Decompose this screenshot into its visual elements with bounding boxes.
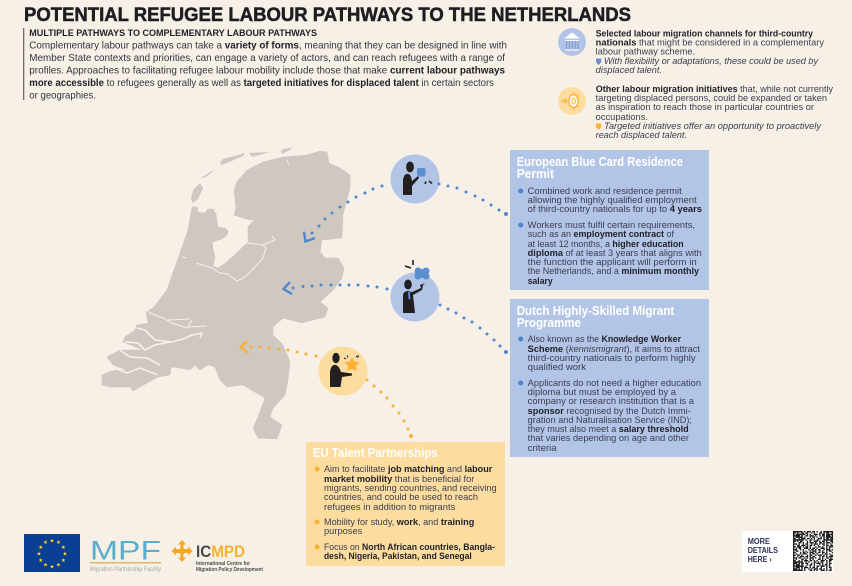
legend: other labour migration initiatives [558,84,833,140]
text: more details here: HERE › [748,555,772,564]
logo: EU flag: ★ [37,551,42,557]
panel: European Blue Card Residence Permit: such as an employment contract of [528,229,674,239]
panel: EU Talent Partnerships: purposes [324,526,363,536]
text: more details here: DETAILS [748,546,778,555]
panel: Dutch Highly-Skilled Migrant Programme: Applicants do not need a higher education [528,378,701,388]
legend: other labour migration initiatives: reach displaced talent. [596,130,687,140]
arrow: highly-skilled route to the map [284,282,508,354]
QR finder patterns [793,531,833,571]
legend: other labour migration initiatives: Other labour migration initiatives that, while not currently [596,84,833,94]
icon: person with puzzle piece, blue circle [390,260,440,322]
logo: Migration Partnership Facility: MPF [90,536,161,566]
legend: other labour migration initiatives: as inspiration to reach those in particular countries or [596,102,814,112]
text block: multiple pathways introduction [23,27,507,102]
panel: EU Talent Partnerships: market mobility that is beneficial for [324,474,474,484]
panel: EU Talent Partnerships: countries, and could be used to reach [324,492,478,502]
text block: multiple pathways introduction: profiles. Approaches to facilitating refugee labour mobility include those that make current labour pathways [29,66,505,76]
heading: Dutch Highly-Skilled [517,304,675,330]
icon: target with arrow [558,87,586,115]
heading: Dutch Highly-Skilled: Dutch Highly-Skilled Migrant [517,304,675,318]
legend: other labour migration initiatives: Targeted initiatives offer an opportunity to proactively [604,121,821,131]
panel: European Blue Card Residence Permit: the Netherlands, and a minimum monthly [528,266,700,276]
text: more details here: MORE [748,537,770,546]
panel: EU Talent Partnerships [306,442,505,566]
panel: Dutch Highly-Skilled Migrant Programme: company or research institution that is a [528,396,695,406]
title: POTENTIAL REFUGEE LABOUR PATHWAYS TO THE NETHERLANDS [24,4,631,26]
text block: multiple pathways introduction: more accessible to refugees generally as well as targeted initiatives for displaced talent in certain sectors [29,78,494,89]
panel: Dutch Highly-Skilled Migrant Programme: criteria [528,443,558,453]
panel: European Blue Card Residence Permit: allowing the highly qualified employment [528,195,697,205]
legend: selected labour migration channels: displaced talent. [596,65,662,75]
panel: EU Talent Partnerships: Mobility for study, work, and training [324,517,474,527]
legend: other labour migration initiatives: targeting displaced persons, could be expanded or taken [596,93,827,103]
icon: person with star, yellow circle [318,346,368,396]
logo: EU flag: ★ [43,563,48,569]
link box: more details with QR code [742,531,833,572]
logo: EU flag: ★ [38,545,43,551]
legend: selected labour migration channels: Selected labour migration channels for third-country [596,28,814,38]
text: more details here [748,537,778,564]
text block: multiple pathways introduction: or geographies. [29,90,96,102]
logo: EU flag: ★ [38,558,43,564]
panel: European Blue Card Residence Permit: Workers must fulfil certain requirements, [528,220,695,230]
icon: blue pin [596,58,601,65]
icon: institution building [558,28,586,56]
panel: EU Talent Partnerships: refugees in addition to migrants [324,502,456,512]
arrow: blue card route to the map [304,182,508,242]
logo: EU flag: ★ [50,564,55,570]
panel: Dutch Highly-Skilled Migrant Programme: qualified work [528,362,586,372]
map of the Netherlands [102,147,350,439]
legend: other labour migration initiatives: occupations. [596,112,648,122]
heading: EU Talent Partnerships: EU Talent Partnerships [313,446,438,460]
logo: Migration Partnership Facility [90,536,162,573]
legend: selected labour migration channels: With flexibility or adaptations, these could be used by [604,56,818,66]
legend: selected labour migration channels: nationals that might be considered in a complementary [596,38,824,48]
logo: EU flag: ★ [61,545,66,551]
icon: yellow pin [596,124,601,130]
panel: European Blue Card Residence Permit: diploma of at least 3 years that aligns with [528,248,702,258]
panel: EU Talent Partnerships: migrants, sending countries, and receiving [324,483,497,493]
logo: EU flag: ★ [63,551,68,557]
panel: Dutch Highly-Skilled Migrant Programme: third-country nationals to perform highly [528,353,696,363]
panel: European Blue Card Residence Permit: salary [528,276,554,286]
icon: four arrows [172,540,192,562]
panel: Dutch Highly-Skilled Migrant Programme: they must also meet a salary threshold [528,424,689,434]
heading: multiple pathways: MULTIPLE PATHWAYS TO COMPLEMENTARY LABOUR PATHWAYS [29,27,317,38]
panel: EU Talent Partnerships: Aim to facilitate job matching and labour [324,464,493,474]
icon: person with document, blue circle [390,154,440,204]
logo: EU flag: ★ [61,558,66,564]
panel: Dutch Highly-Skilled Migrant Programme: gration and Naturalisation Service (IND); [528,415,692,425]
logo: EU flag: ★ [56,563,61,569]
arrow: talent partnerships route to the map [240,341,413,438]
logo: EU flag [24,534,80,572]
panel: EU Talent Partnerships: desh, Nigeria, Pakistan, and Senegal [324,551,472,561]
QR code [793,531,833,571]
heading: European Blue Card: European Blue Card Residence [517,155,683,169]
panel: Dutch Highly-Skilled Migrant Programme: that varies depending on age and other [528,433,689,443]
logo: ICMPD: International Centre for [196,561,250,567]
panel: European Blue Card Residence Permit: the function the applicant will perform in [528,257,697,267]
panel: Dutch Highly-Skilled Migrant Programme: Also known as the Knowledge Worker [528,334,681,344]
logo: EU flag: ★ [56,540,61,546]
panel: EU Talent Partnerships: Focus on North African countries, Bangla- [324,542,495,552]
panel: European Blue Card Residence Permit: Combined work and residence permit [528,186,682,196]
logo: ICMPD: ICMPD [196,543,245,561]
heading: European Blue Card: Permit [517,167,555,181]
panel: Dutch Highly-Skilled Migrant Programme: diploma but must be employed by a [528,387,677,397]
legend: selected labour migration channels [558,28,824,75]
panel: European Blue Card Residence Permit: at least 12 months, a higher education [528,239,684,249]
heading: Dutch Highly-Skilled: Programme [517,316,581,330]
logo: EU flag: ★ [43,540,48,546]
heading: European Blue Card [517,155,683,181]
panel: European Blue Card Residence Permit [510,150,709,290]
panel: Dutch Highly-Skilled Migrant Programme: Scheme (kennismigrant), it aims to attract [528,344,700,354]
logo: ICMPD: Migration Policy Development [196,567,263,573]
panel: Dutch Highly-Skilled Migrant Programme: sponsor recognised by the Dutch Immi- [528,406,691,416]
text block: multiple pathways introduction: Complementary labour pathways can take a variety of forms, meaning that they can be designed in line with [29,40,507,52]
panel: European Blue Card Residence Permit: of third-country nationals for up to 4 years [528,204,702,214]
logo: ICMPD [172,540,263,573]
legend: selected labour migration channels: labour pathway scheme. [596,46,695,56]
panel: Dutch Highly-Skilled Migrant Programme [510,299,709,457]
logo: EU flag: ★ [50,538,55,544]
text block: multiple pathways introduction: Member State contexts and priorities, can engage a variety of actors, and can reach refugees with a range of [29,53,505,64]
logo: Migration Partnership Facility: Migration Partnership Facility [90,566,162,573]
